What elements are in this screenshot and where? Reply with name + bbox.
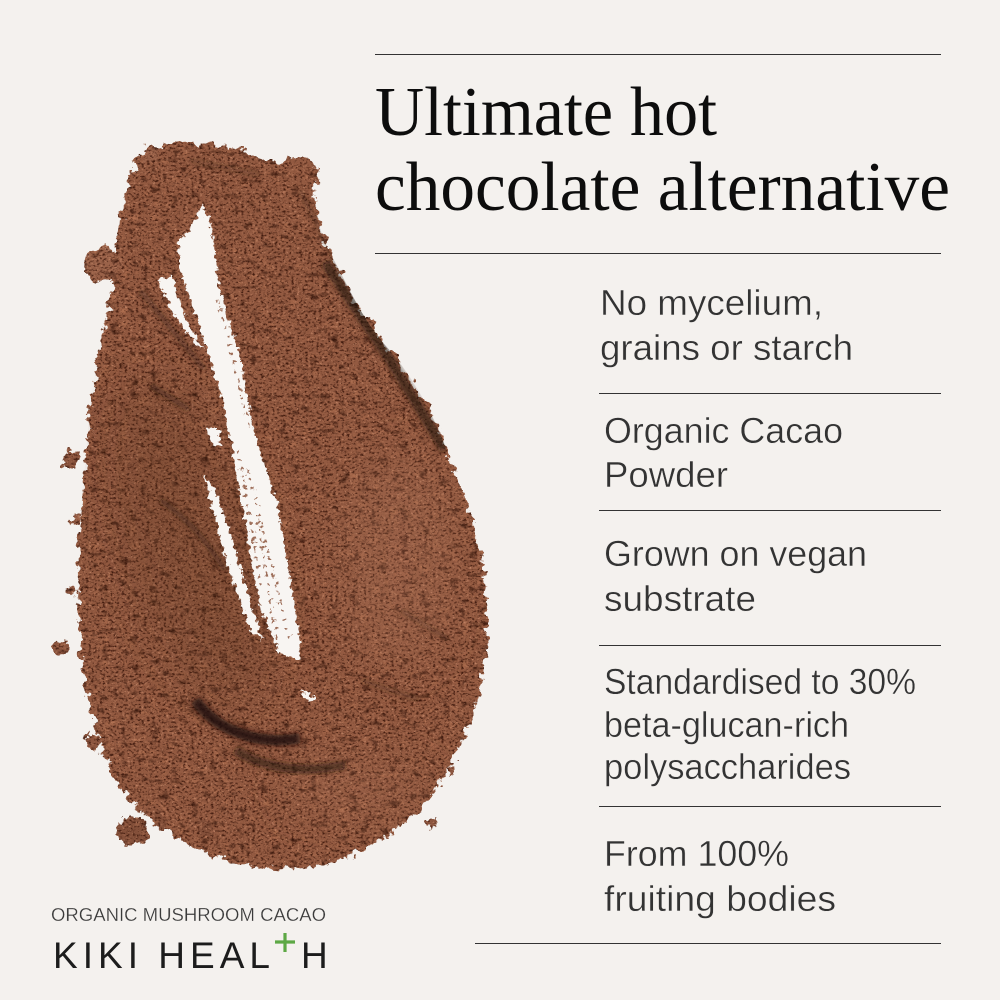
benefit: beta-glucan [604, 661, 916, 787]
title: Ultimate hot [375, 74, 718, 151]
brand logo: H [301, 935, 328, 976]
benefit: organic cacao: Powder [604, 454, 728, 495]
powder shading [71, 160, 455, 825]
title [375, 74, 950, 226]
white streak in powder [157, 205, 318, 704]
streak shape [157, 205, 318, 704]
powder body [55, 143, 487, 869]
product name: ORGANIC MUSHROOM CACAO [51, 904, 326, 925]
benefit: vegan substrate: substrate [604, 578, 756, 619]
title: chocolate alternative [375, 149, 950, 226]
benefit: no mycelium: grains or starch [600, 327, 853, 368]
benefit: beta-glucan: Standardised to 30% [604, 661, 916, 702]
benefit: organic cacao [604, 410, 843, 495]
rule under title [375, 253, 941, 254]
benefit: fruiting bodies: fruiting bodies [604, 878, 836, 919]
benefit: beta-glucan: beta-glucan-rich [604, 704, 849, 745]
benefit: no mycelium: No mycelium, [600, 282, 823, 323]
icon: green plus [275, 933, 295, 952]
streak flecks [218, 300, 290, 650]
benefit: organic cacao: Organic Cacao [604, 410, 843, 451]
benefit: fruiting bodies: From 100% [604, 833, 789, 874]
benefit: fruiting bodies [604, 833, 836, 919]
benefit: beta-glucan: polysaccharides [604, 746, 851, 787]
cocoa powder pile [55, 143, 487, 869]
benefit: no mycelium [600, 282, 853, 368]
top rule [375, 54, 941, 55]
benefit: vegan substrate: Grown on vegan [604, 533, 867, 574]
brand logo: KIKI HEAL [53, 935, 270, 976]
benefit: vegan substrate [604, 533, 867, 619]
